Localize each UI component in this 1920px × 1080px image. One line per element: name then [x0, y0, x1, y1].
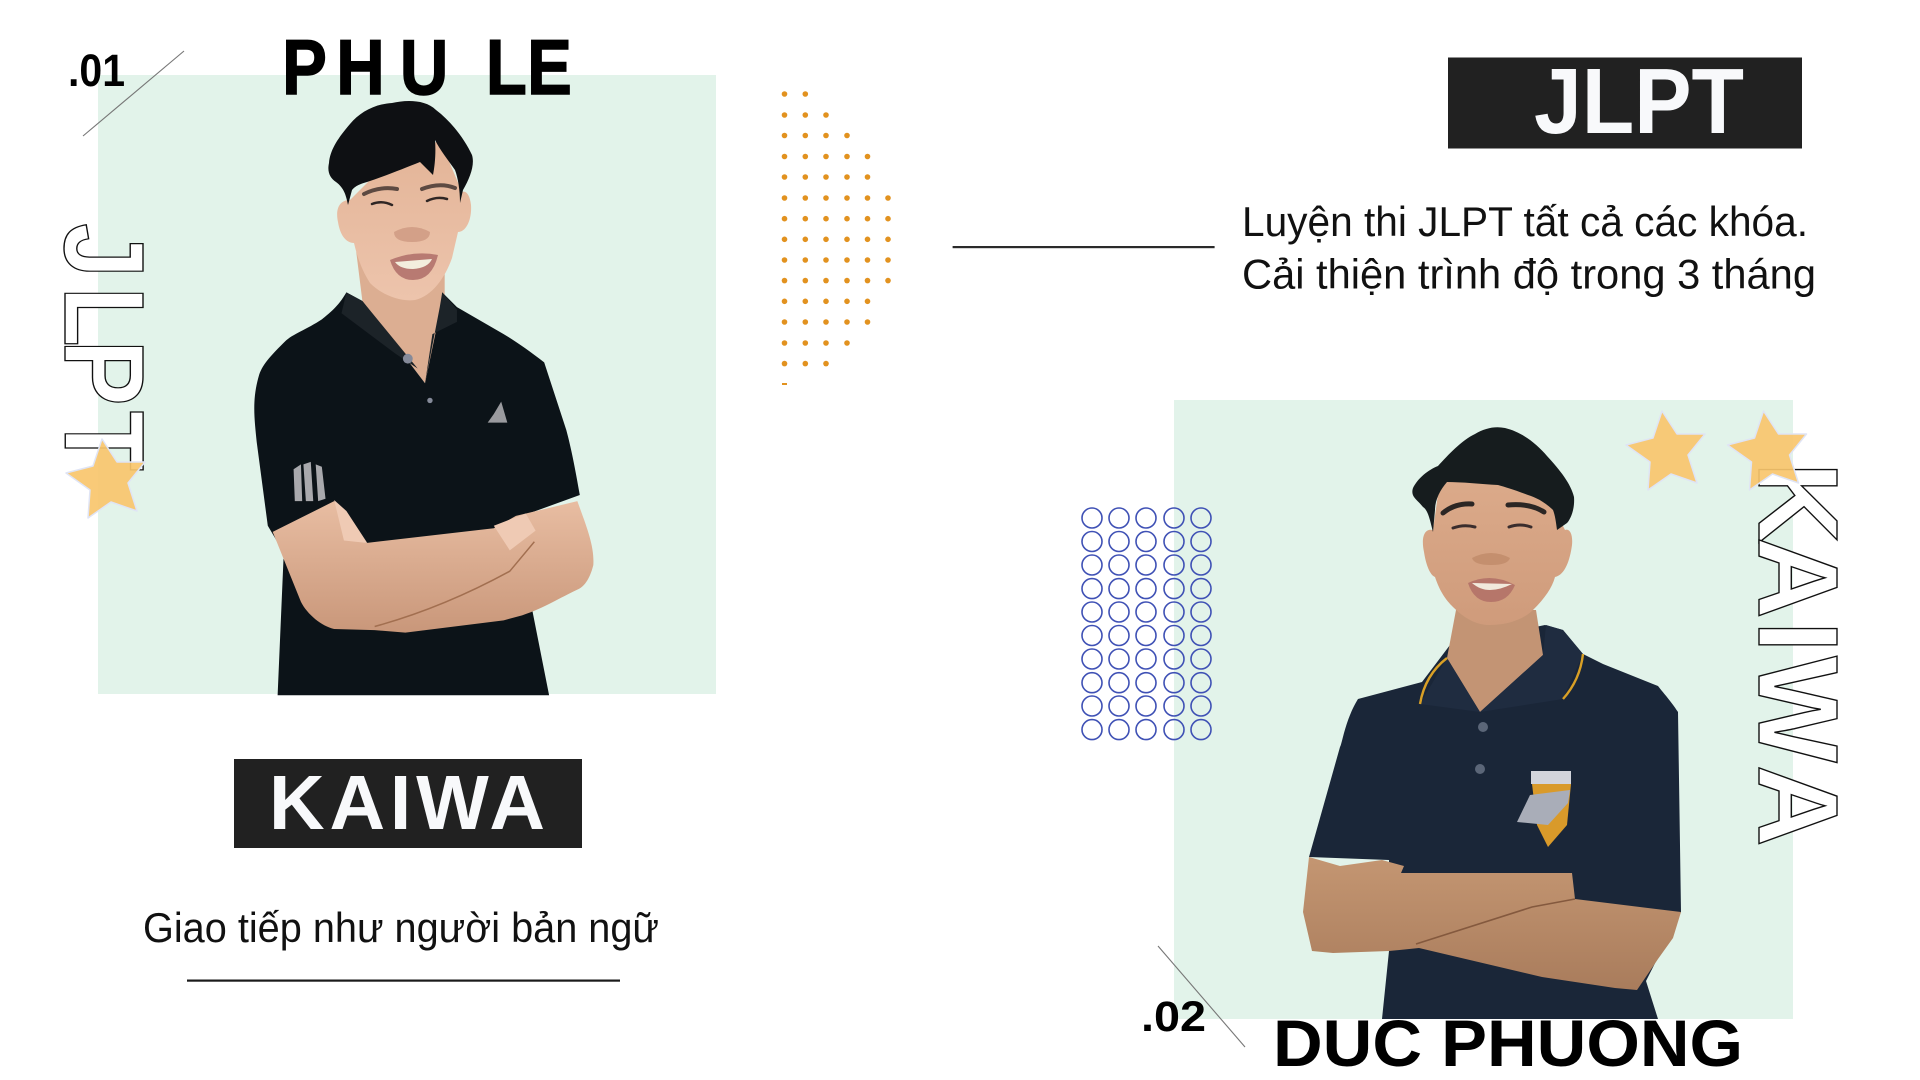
icon: star 2: [1626, 411, 1705, 490]
orange dot pattern: [782, 91, 891, 385]
vertical outlined text KAIWA: KAIWA: [1735, 462, 1861, 847]
underline KAIWA: [187, 980, 620, 982]
badge: JLPT: JLPT: [1534, 49, 1744, 153]
description JLPT: [1242, 198, 1816, 298]
description KAIWA: Giao tiếp như người bản ngữ: [143, 904, 659, 951]
panel: DUC PHUONG background: [1174, 400, 1793, 1019]
number .01: .01: [68, 45, 125, 96]
diagonal line .02: [1158, 946, 1245, 1047]
number .02: .02: [1141, 993, 1206, 1041]
portrait: Phu Le: [254, 101, 593, 695]
vertical outlined text JLPT: JLPT: [40, 223, 166, 471]
badge: JLPT: [1448, 49, 1802, 153]
portrait: Duc Phuong: [1303, 427, 1681, 1019]
icon: star left: [66, 439, 145, 518]
name: PHU LE: PHU LE: [282, 24, 572, 111]
panel: PHU LE background: [98, 75, 716, 694]
name: DUC PHUONG: DUC PHUONG: [1273, 1006, 1743, 1080]
connector line top: [953, 246, 1215, 248]
blue circle pattern: [1082, 508, 1211, 740]
icon: star 3: [1728, 411, 1806, 490]
description JLPT: Cải thiện trình độ trong 3 tháng: [1242, 250, 1816, 298]
badge: KAIWA: KAIWA: [269, 760, 545, 846]
diagonal line .01: [83, 51, 184, 136]
description JLPT: Luyện thi JLPT tất cả các khóa.: [1242, 198, 1808, 245]
